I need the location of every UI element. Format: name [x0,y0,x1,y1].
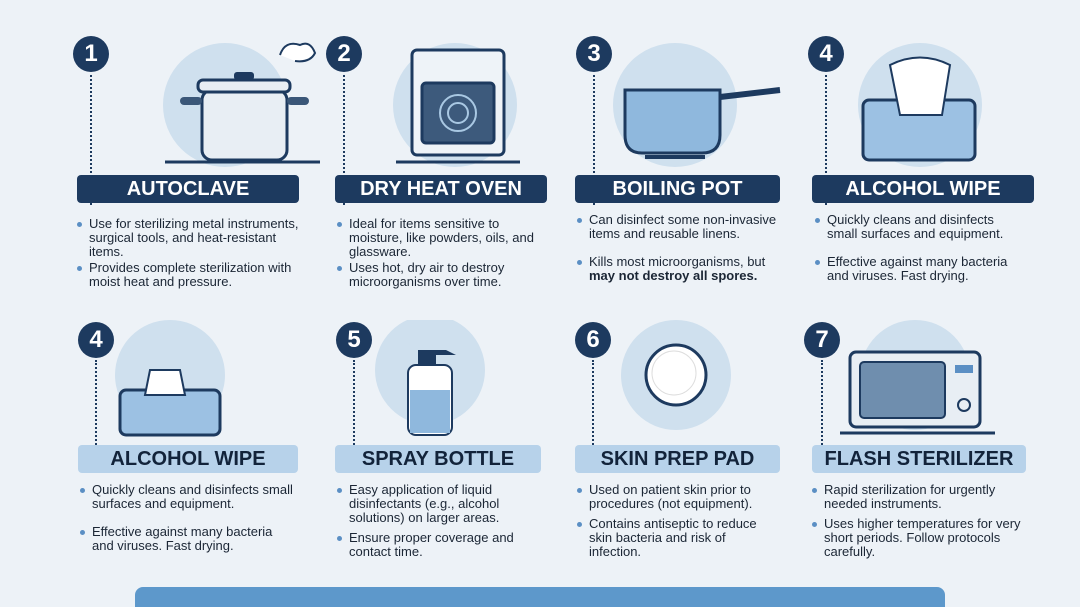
icon: boiling pot [613,43,780,167]
heading [77,175,299,203]
text [77,216,299,289]
text: Contains antiseptic to reduce skin bacteria and risk of infection. [589,516,757,559]
number 5: 5 [347,326,361,353]
panel: skin prep pad [575,320,780,559]
number 4 [78,322,114,358]
panel: boiling pot [575,36,780,283]
heading [575,445,780,473]
text: Easy application of liquid disinfectants (e.g., alcohol solutions) on larger areas. [349,482,499,525]
number 1 [73,36,109,72]
text [337,482,514,559]
number 4: 4 [89,326,103,353]
heading: ALCOHOL WIPE [845,178,1001,200]
text [812,482,1021,559]
number 2 [326,36,362,72]
text: Can disinfect some non-invasive items and reusable linens. [589,212,776,241]
text [337,216,534,289]
text: Uses higher temperatures for very short periods. Follow protocols carefully. [824,516,1021,559]
panel: alcohol wipe bottom [78,320,298,553]
heading [812,445,1026,473]
number 4 [808,36,844,72]
number 2: 2 [337,40,351,67]
heading: BOILING POT [612,178,742,200]
text: Uses hot, dry air to destroy microorganisms over time. [349,260,504,289]
text: Used on patient skin prior to procedures (not equipment). [589,482,752,511]
heading [335,445,541,473]
icon: autoclave pot [163,42,320,167]
heading [335,175,547,203]
icon: microwave [840,320,995,434]
heading: AUTOCLAVE [127,178,249,200]
number 3: 3 [587,40,601,67]
number 1: 1 [84,40,98,67]
heading [812,175,1034,203]
text: Ensure proper coverage and contact time. [349,530,514,559]
text: Use for sterilizing metal instruments, surgical tools, and heat-resistant items. [89,216,299,259]
panel: dry heat oven [326,36,547,289]
number 5 [336,322,372,358]
icon: oven [393,43,520,167]
text: Quickly cleans and disinfects small surfaces and equipment. [92,482,293,511]
heading: FLASH STERILIZER [825,448,1013,470]
number 7: 7 [815,326,829,353]
text [577,482,757,559]
icon: wipe box [858,43,982,167]
number 3 [576,36,612,72]
heading: ALCOHOL WIPE [110,448,266,470]
icon: spray bottle [375,320,485,436]
panel: autoclave [73,36,320,289]
heading: SKIN PREP PAD [601,448,754,470]
heading [575,175,780,203]
text: Provides complete sterilization with moist heat and pressure. [89,260,291,289]
number 4: 4 [819,40,833,67]
panel: spray bottle [335,320,541,559]
text: Effective against many bacteria and viruses. Fast drying. [827,254,1007,283]
number 6 [575,322,611,358]
icon: pad [621,320,731,430]
panel: alcohol wipe top [808,36,1034,283]
text [815,212,1008,283]
heading: DRY HEAT OVEN [360,178,522,200]
panel: flash sterilizer [804,320,1026,559]
number 7 [804,322,840,358]
text: Quickly cleans and disinfects small surfaces and equipment. [827,212,1003,241]
text: Kills most microorganisms, but may not destroy all spores. [589,254,765,283]
text: Rapid sterilization for urgently needed instruments. [824,482,995,511]
text [577,212,776,283]
text [80,482,293,553]
heading [78,445,298,473]
text: Ideal for items sensitive to moisture, like powders, oils, and glassware. [349,216,534,259]
bottom banner [135,587,945,607]
icon: wipe pack [115,320,225,436]
number 6: 6 [586,326,600,353]
text: Effective against many bacteria and viruses. Fast drying. [92,524,272,553]
heading: SPRAY BOTTLE [362,448,514,470]
